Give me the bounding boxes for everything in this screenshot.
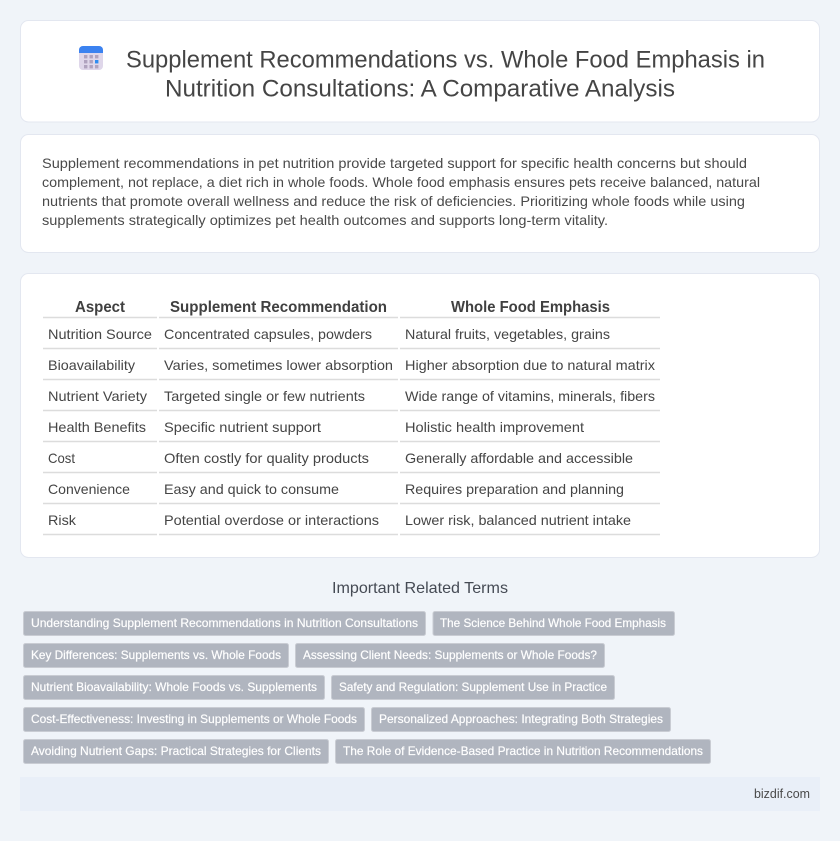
- icon: calendar: [79, 46, 103, 70]
- table header: Whole Food Emphasis: [451, 299, 610, 316]
- row: cost: Cost: [48, 450, 75, 466]
- tag: Assessing Client Needs: Supplements or Whole Foods?: [303, 648, 597, 662]
- row: bioavailability: Higher absorption due to natural matrix: [405, 357, 655, 373]
- related term tags: [24, 612, 710, 764]
- row: health benefits: Specific nutrient support: [164, 419, 321, 435]
- tag: Key Differences: Supplements vs. Whole Foods: [31, 648, 281, 662]
- row: cost: [48, 450, 633, 466]
- row: convenience: Easy and quick to consume: [164, 481, 339, 497]
- panel: comparison table: [20, 274, 820, 558]
- row: bioavailability: Varies, sometimes lower absorption: [164, 357, 393, 373]
- tag: [24, 740, 328, 764]
- row: risk: Risk: [48, 512, 77, 528]
- row: nutrient variety: Wide range of vitamins, minerals, fibers: [405, 388, 655, 404]
- tag: [372, 708, 670, 732]
- row: nutrition source: [48, 326, 610, 342]
- row: cost: Generally affordable and accessible: [405, 450, 633, 466]
- tag: [24, 644, 288, 668]
- table header: [75, 299, 610, 316]
- row: nutrient variety: [48, 388, 655, 404]
- row: health benefits: Holistic health improvement: [405, 419, 584, 435]
- summary paragraph: Supplement recommendations in pet nutrition provide targeted support for specific health concerns but should: [42, 155, 747, 171]
- row: nutrition source: Natural fruits, vegetables, grains: [405, 326, 610, 342]
- summary paragraph: nutrients that promote overall wellness and reduce the risk of deficiencies. Prioritizing whole foods while using: [42, 193, 745, 209]
- tag: [433, 612, 674, 636]
- tag: [296, 644, 604, 668]
- tag: Nutrient Bioavailability: Whole Foods vs. Supplements: [31, 680, 317, 694]
- row: convenience: [48, 481, 624, 497]
- tag: Avoiding Nutrient Gaps: Practical Strategies for Clients: [31, 744, 321, 758]
- table header: Aspect: [75, 299, 126, 316]
- tag: [24, 708, 364, 732]
- row: convenience: Convenience: [48, 481, 130, 497]
- title: Supplement Recommendations vs. Whole Food Emphasis in: [126, 46, 765, 74]
- tag: [336, 740, 710, 764]
- tag: Cost-Effectiveness: Investing in Supplements or Whole Foods: [31, 712, 357, 726]
- panel: summary: [20, 134, 820, 252]
- row: risk: Potential overdose or interactions: [164, 512, 379, 528]
- row: cost: Often costly for quality products: [164, 450, 369, 466]
- row: nutrient variety: Nutrient Variety: [48, 388, 147, 404]
- row: bioavailability: Bioavailability: [48, 357, 135, 373]
- row: convenience: Requires preparation and planning: [405, 481, 624, 497]
- tag: Understanding Supplement Recommendations in Nutrition Consultations: [31, 616, 418, 630]
- row: bioavailability: [48, 357, 655, 373]
- title: Nutrition Consultations: A Comparative Analysis: [165, 76, 675, 102]
- heading: related terms: Important Related Terms: [332, 580, 508, 597]
- tag: Safety and Regulation: Supplement Use in Practice: [339, 680, 607, 694]
- tag: [24, 612, 426, 636]
- tag: [332, 676, 614, 700]
- summary paragraph: supplements strategically optimizes pet health outcomes and supports long-term vitality.: [42, 212, 608, 228]
- table header: Supplement Recommendation: [170, 299, 387, 316]
- row: nutrient variety: Targeted single or few nutrients: [164, 388, 365, 404]
- panel: title card: [20, 20, 820, 122]
- tag: The Science Behind Whole Food Emphasis: [440, 616, 666, 630]
- tag: Personalized Approaches: Integrating Both Strategies: [379, 712, 663, 726]
- row: health benefits: Health Benefits: [48, 419, 146, 435]
- footer: bizdif.com: [754, 786, 810, 801]
- title: [126, 46, 765, 102]
- tag: [24, 676, 324, 700]
- tag: The Role of Evidence-Based Practice in Nutrition Recommendations: [343, 744, 703, 758]
- footer: [20, 777, 820, 811]
- row: health benefits: [48, 419, 584, 435]
- row: nutrition source: Concentrated capsules, powders: [164, 326, 372, 342]
- row: nutrition source: Nutrition Source: [48, 326, 152, 342]
- row: risk: Lower risk, balanced nutrient intake: [405, 512, 631, 528]
- summary paragraph: [42, 155, 760, 228]
- row: risk: [48, 512, 631, 528]
- summary paragraph: complement, not replace, a diet rich in whole foods. Whole food emphasis ensures pets receive balanced, natural: [42, 174, 760, 190]
